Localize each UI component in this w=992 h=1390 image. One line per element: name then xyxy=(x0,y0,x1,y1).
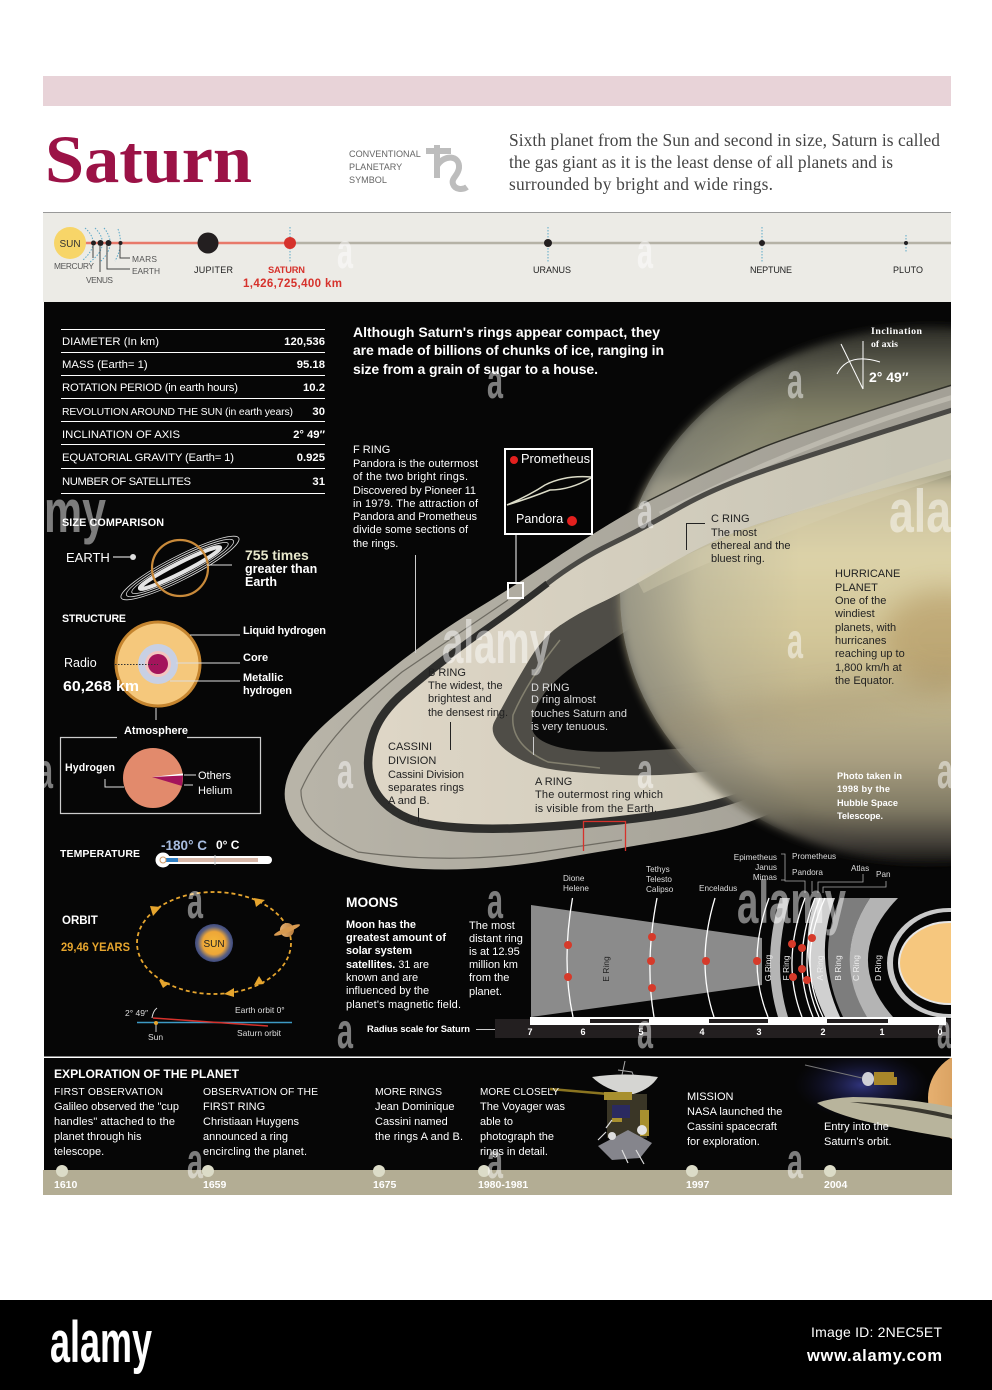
timeline entries xyxy=(54,1087,892,1158)
moon labels: Tethys xyxy=(646,865,670,874)
callout: hurricane planet: HURRICANE xyxy=(835,568,900,580)
planet labels: VENUS xyxy=(86,275,113,285)
inclination of axis: 2° 49″ xyxy=(869,369,909,385)
watermarks: a xyxy=(337,223,354,279)
callout: hurricane planet: 1,800 km/h at xyxy=(835,662,902,674)
temperature: TEMPERATURE xyxy=(60,848,140,860)
stats table: 120,536 xyxy=(284,336,325,348)
Encke gap line xyxy=(301,600,622,858)
structure: hydrogen xyxy=(243,685,292,697)
orbit xyxy=(61,892,301,1042)
image: Cassini spacecraft xyxy=(550,1061,658,1164)
moons text: MOONS xyxy=(346,894,398,910)
radius scale: 0 xyxy=(937,1027,943,1037)
sun: SUN xyxy=(59,239,81,250)
orbit inclination diagram: Sun xyxy=(148,1032,163,1042)
ring labels: B Ring xyxy=(833,955,843,981)
entry 1675: the rings A and B. xyxy=(375,1131,463,1143)
callout: hurricane planet: planets, with xyxy=(835,622,896,634)
planet labels xyxy=(54,254,160,285)
watermarks: a xyxy=(787,613,804,669)
watermarks xyxy=(37,223,954,1189)
saturn distance: 1,426,725,400 km xyxy=(243,278,342,290)
entry 1675 xyxy=(375,1087,463,1143)
callout: hurricane planet: windiest xyxy=(834,608,875,620)
callout: F ring xyxy=(353,444,479,550)
entry 1997 xyxy=(687,1091,782,1148)
entry 1675: Cassini named xyxy=(375,1116,448,1128)
saturn distance: SATURN xyxy=(268,265,305,275)
timeline years xyxy=(54,1179,848,1191)
callout: Cassini division: Cassini Division xyxy=(388,769,464,781)
stats table xyxy=(61,330,326,494)
outer planet labels: NEPTUNE xyxy=(750,265,792,275)
callout: B ring: B RING xyxy=(428,667,466,679)
heading: EXPLORATION OF THE PLANET xyxy=(54,1067,240,1081)
entry 1659: Christiaan Huygens xyxy=(203,1116,300,1128)
moon labels: Janus xyxy=(755,863,777,872)
moons text: satellites. 31 are xyxy=(346,959,429,971)
entry 1659: encircling the planet. xyxy=(203,1146,307,1158)
callout: D ring: touches Saturn and xyxy=(531,708,627,720)
watermarks: a xyxy=(187,873,204,929)
callout: C ring xyxy=(686,513,791,565)
callout: Cassini division: CASSINI xyxy=(388,741,432,753)
stats table: MASS (Earth= 1) xyxy=(62,359,148,371)
timeline years: 1997 xyxy=(686,1179,710,1191)
entry 2004 xyxy=(824,1121,892,1148)
structure: Liquid hydrogen xyxy=(243,625,326,637)
moon orbits xyxy=(567,898,825,1017)
headline callout xyxy=(353,324,664,377)
conventional planetary symbol label: PLANETARY xyxy=(349,162,402,172)
sun: SUN xyxy=(203,939,225,950)
watermarks: a xyxy=(637,483,654,539)
watermarks: a xyxy=(187,1133,204,1189)
moon labels: Calipso xyxy=(646,885,674,894)
inset: Prometheus and Pandora xyxy=(505,449,592,534)
entry 1610: telescope. xyxy=(54,1146,104,1158)
orbit path xyxy=(137,892,291,994)
moons text: solar system xyxy=(346,945,412,957)
radius scale xyxy=(495,1017,951,1038)
stats table: 10.2 xyxy=(303,382,325,394)
entry 1997: MISSION xyxy=(687,1091,734,1103)
orbit arrows xyxy=(150,898,265,997)
photo credit: 1998 by the xyxy=(837,784,890,794)
ring shadow line on the planet xyxy=(644,384,951,504)
callout: F ring: Discovered by Pioneer 11 xyxy=(353,485,476,497)
footer logo: alamy xyxy=(50,1310,152,1375)
watermarks: a xyxy=(487,1133,504,1189)
entry 1997: NASA launched the xyxy=(687,1106,782,1118)
watermarks: a xyxy=(787,1133,804,1189)
callout: C ring: ethereal and the xyxy=(711,540,791,552)
moon labels xyxy=(563,852,891,894)
entry 1610: FIRST OBSERVATION xyxy=(54,1087,163,1098)
stats table: INCLINATION OF AXIS xyxy=(62,429,180,441)
front A ring xyxy=(560,386,951,624)
inclination of axis: Inclination xyxy=(871,326,923,337)
Cassini division over the planet xyxy=(546,408,951,586)
front ring lower edge blend xyxy=(638,470,951,593)
callout: F ring: divide some sections of xyxy=(353,524,469,536)
size comparison: 755 times xyxy=(245,547,309,563)
entry 1610 xyxy=(54,1087,179,1158)
panel: black main xyxy=(44,302,951,1057)
stats table: 2° 49″ xyxy=(293,429,326,441)
photo credit xyxy=(837,771,902,821)
panel: solar system distance strip xyxy=(43,212,951,302)
watermarks: a xyxy=(637,743,654,799)
pointer to ring detail xyxy=(508,534,523,598)
radius scale: 1 xyxy=(879,1027,885,1037)
atmosphere: Helium xyxy=(198,785,232,797)
structure: STRUCTURE xyxy=(62,613,126,625)
intro text: the gas giant as it is the least dense of all planets and is xyxy=(509,152,893,172)
moons text: from the xyxy=(469,972,509,984)
callout: B ring: brightest and xyxy=(428,693,492,705)
icon: saturn vs earth size xyxy=(116,527,244,609)
stats table: 95.18 xyxy=(297,359,325,371)
front B ring xyxy=(560,413,951,625)
inner dark gap xyxy=(532,632,680,752)
entry 1997: Cassini spacecraft xyxy=(687,1121,777,1133)
sun xyxy=(195,924,233,962)
small saturn xyxy=(273,922,301,938)
leader lines xyxy=(93,245,130,272)
timeline dots xyxy=(56,1165,836,1177)
top pink band xyxy=(43,76,951,106)
orbit inclination diagram: Earth orbit 0° xyxy=(235,1005,285,1015)
callout: D ring xyxy=(531,682,627,733)
planet labels: EARTH xyxy=(132,266,160,276)
temperature: -180° C xyxy=(161,837,207,853)
saturn distance xyxy=(243,265,342,290)
atmosphere: Others xyxy=(198,770,232,782)
callout: D ring: D RING xyxy=(531,682,570,694)
inset: Prometheus and Pandora: Pandora xyxy=(516,512,563,526)
moons text: influenced by the xyxy=(346,985,429,997)
watermarks: a xyxy=(637,223,654,279)
callout: B ring xyxy=(428,667,508,719)
callout: hurricane planet: the Equator. xyxy=(835,675,894,687)
stats table: REVOLUTION AROUND THE SUN (in earth years) xyxy=(62,407,293,418)
callout: F ring: Pandora is the outermost xyxy=(353,458,478,470)
callout: hurricane planet xyxy=(834,568,905,687)
orbit inclination diagram xyxy=(125,1005,292,1042)
orbit inclination diagram: Saturn orbit xyxy=(237,1028,282,1038)
footer bar xyxy=(0,1300,992,1390)
watermarks: a xyxy=(937,1003,952,1059)
callout: F ring: in 1979. The attraction of xyxy=(353,498,479,510)
outer planet labels xyxy=(194,265,923,275)
outer planet labels: PLUTO xyxy=(893,265,923,275)
size comparison: greater than xyxy=(245,562,317,576)
planet body xyxy=(620,327,992,863)
moons text: known and are xyxy=(346,972,418,984)
moons text: greatest amount of xyxy=(346,932,446,944)
callout: B ring: The widest, the xyxy=(428,680,503,692)
radius scale: 4 xyxy=(699,1027,705,1037)
conventional planetary symbol label: CONVENTIONAL xyxy=(349,149,421,159)
ring bands xyxy=(770,898,898,1017)
icon: saturn symbol xyxy=(426,145,467,189)
temperature xyxy=(60,837,272,868)
stats table: 30 xyxy=(312,406,325,418)
moons text: million km xyxy=(469,959,518,971)
moon labels: Mimas xyxy=(753,873,777,882)
entry 1610: handles" attached to the xyxy=(54,1116,175,1128)
B ring xyxy=(372,577,729,824)
photo credit: Hubble Space xyxy=(837,798,898,808)
ring labels: G Ring xyxy=(763,955,773,981)
callout: C ring: C RING xyxy=(711,513,750,525)
inset: Prometheus and Pandora: Prometheus xyxy=(521,452,590,466)
moon labels: Epimetheus xyxy=(734,853,777,862)
headline callout: are made of billions of chunks of ice, ranging in xyxy=(353,342,664,358)
A ring xyxy=(284,508,766,870)
inclination of axis xyxy=(837,326,923,389)
stats table: 0.925 xyxy=(297,452,325,464)
entry 1980-1981: able to xyxy=(480,1116,513,1128)
C ring xyxy=(492,591,704,776)
radius scale: 2 xyxy=(820,1027,826,1037)
radius scale: 3 xyxy=(756,1027,762,1037)
moons text xyxy=(346,894,523,1011)
Cassini division, upper left xyxy=(449,584,548,656)
moons and rings diagram: E Ring xyxy=(601,956,611,982)
radius scale: 5 xyxy=(638,1027,644,1037)
timeline band xyxy=(43,1170,952,1195)
entry 1980-1981: The Voyager was xyxy=(480,1101,565,1113)
atmosphere: Atmosphere xyxy=(124,725,188,737)
callout: Cassini division xyxy=(388,741,464,807)
callout: Cassini division: A and B. xyxy=(388,795,430,807)
callout: F ring: the rings. xyxy=(353,538,398,550)
entry 1659: announced a ring xyxy=(203,1131,288,1143)
callout: B ring: the densest ring. xyxy=(428,707,508,719)
structure diagram xyxy=(115,622,200,706)
moon labels: Dione xyxy=(563,874,585,883)
callout: Cassini division: separates rings xyxy=(388,782,464,794)
C ring detail xyxy=(513,640,600,768)
size comparison: EARTH xyxy=(66,550,110,565)
atmosphere xyxy=(60,725,260,814)
callout: hurricane planet: reaching up to xyxy=(835,648,905,660)
callout: hurricane planet: One of the xyxy=(835,595,886,607)
conventional planetary symbol label xyxy=(349,149,421,185)
callout: F ring: Pandora and Prometheus xyxy=(353,511,478,523)
stats table: EQUATORIAL GRAVITY (Earth= 1) xyxy=(62,452,234,464)
ring labels: C Ring xyxy=(851,955,861,981)
timeline years: 1675 xyxy=(373,1179,397,1191)
stats table: NUMBER OF SATELLITES xyxy=(62,476,191,488)
entry 2004: Entry into the xyxy=(824,1121,889,1133)
callout: C ring: The most xyxy=(711,527,757,539)
photo credit: Telescope. xyxy=(837,811,883,821)
moon labels: Prometheus xyxy=(792,852,836,861)
entry 1659 xyxy=(203,1087,318,1158)
callout: A ring xyxy=(535,776,663,815)
ring labels xyxy=(763,955,883,981)
structure xyxy=(62,613,326,720)
structure: Metallic xyxy=(243,672,283,684)
planet labels: MERCURY xyxy=(54,261,94,271)
moon labels: Telesto xyxy=(646,875,672,884)
watermarks: alamy xyxy=(737,869,846,936)
callout: D ring: is very tenuous. xyxy=(531,721,608,733)
watermarks: ala xyxy=(889,478,951,545)
callout: hurricane planet: hurricanes xyxy=(835,635,887,647)
watermarks: a xyxy=(937,743,954,799)
planets on scale xyxy=(91,232,908,254)
orbit: 29,46 YEARS xyxy=(61,942,130,954)
moon labels: Pandora xyxy=(792,868,823,877)
moon labels: Pan xyxy=(876,870,891,879)
entry 1610: planet through his xyxy=(54,1131,142,1143)
callout: A ring: A RING xyxy=(535,776,572,788)
moons text: planet's magnetic field. xyxy=(346,999,461,1011)
timeline years: 1659 xyxy=(203,1179,227,1191)
watermarks: a xyxy=(337,1003,354,1059)
callout: D ring: D ring almost xyxy=(531,694,596,706)
moons text: is at 12.95 xyxy=(469,946,520,958)
moons text: planet. xyxy=(469,986,502,998)
radius scale label: Radius scale for Saturn xyxy=(367,1023,470,1034)
inner planet orbits xyxy=(83,227,906,262)
image id: Image ID: 2NEC5ET xyxy=(811,1324,942,1340)
stats table: ROTATION PERIOD (in earth hours) xyxy=(62,382,238,394)
headline callout: Although Saturn's rings appear compact, they xyxy=(353,324,660,340)
structure: 60,268 km xyxy=(63,679,139,695)
ring labels: F Ring xyxy=(781,955,791,981)
entry 2004: Saturn's orbit. xyxy=(824,1136,892,1148)
entry 1980-1981: MORE CLOSELY xyxy=(480,1087,559,1098)
image: Cassini entering Saturn's orbit xyxy=(804,1058,952,1139)
entry 1610: Galileo observed the "cup xyxy=(54,1101,179,1113)
ring labels: D Ring xyxy=(873,955,883,981)
entry 1675: Jean Dominique xyxy=(375,1101,454,1113)
structure: Radio xyxy=(64,656,97,670)
timeline years: 1610 xyxy=(54,1179,78,1191)
entry 1997: for exploration. xyxy=(687,1136,760,1148)
site url: www.alamy.com xyxy=(806,1347,942,1365)
entry 1675: MORE RINGS xyxy=(375,1087,442,1098)
stats table: 31 xyxy=(312,476,325,488)
entry 1659: FIRST RING xyxy=(203,1101,265,1113)
pie chart xyxy=(123,748,183,808)
stats table: DIAMETER (In km) xyxy=(62,336,159,348)
planet cloud bands xyxy=(620,362,951,828)
intro text: Sixth planet from the Sun and second in size, Saturn is called xyxy=(509,130,940,150)
E ring xyxy=(531,905,762,1017)
planet and inner rings xyxy=(887,908,951,1018)
entry 1980-1981: photograph the xyxy=(480,1131,554,1143)
entry 1980-1981: rings in detail. xyxy=(480,1146,548,1158)
moons text: distant ring xyxy=(469,933,523,945)
temperature: 0° C xyxy=(216,838,240,852)
atmosphere: Hydrogen xyxy=(65,762,115,774)
watermarks: a xyxy=(787,353,804,409)
callout: F ring: F RING xyxy=(353,444,390,456)
intro text: surrounded by bright and wide rings. xyxy=(509,174,773,194)
watermarks: alamy xyxy=(442,609,551,676)
moon labels: Enceladus xyxy=(699,884,737,893)
entry 1659: OBSERVATION OF THE xyxy=(203,1087,318,1098)
moons xyxy=(564,933,816,992)
headline callout: size from a grain of sugar to a house. xyxy=(353,361,598,377)
intro text xyxy=(509,130,940,194)
rings in front of the planet xyxy=(560,386,951,625)
moons and rings diagram xyxy=(495,852,992,1038)
watermarks: a xyxy=(637,1003,654,1059)
orbit line xyxy=(85,242,951,244)
front ring highlight xyxy=(659,395,951,515)
callout: hurricane planet: PLANET xyxy=(835,582,878,594)
size comparison: Earth xyxy=(245,575,277,589)
watermarks: a xyxy=(37,743,54,799)
entry 1980-1981 xyxy=(480,1087,565,1158)
radius scale: 6 xyxy=(580,1027,586,1037)
sun xyxy=(54,227,86,259)
moon leaders xyxy=(781,854,886,893)
panel: exploration of the planet xyxy=(43,1051,992,1195)
callout: F ring: of the two bright rings. xyxy=(353,471,468,483)
thermometer xyxy=(156,852,272,868)
watermarks: a xyxy=(487,353,504,409)
inclination of axis: of axis xyxy=(871,339,898,350)
timeline years: 2004 xyxy=(824,1179,848,1191)
callout: A ring: The outermost ring which xyxy=(535,789,663,801)
rings behind the planet xyxy=(284,508,766,870)
watermarks: a xyxy=(487,873,504,929)
moons text: The most xyxy=(469,920,515,932)
orbit: ORBIT xyxy=(62,915,98,927)
watermarks: a xyxy=(337,743,354,799)
moon labels: Helene xyxy=(563,884,589,893)
Cassini division xyxy=(368,656,745,829)
ring labels: A Ring xyxy=(815,955,825,981)
moon labels: Atlas xyxy=(851,864,869,873)
callout: Cassini division: DIVISION xyxy=(388,755,436,767)
size comparison: SIZE COMPARISON xyxy=(62,517,164,529)
title: Saturn xyxy=(45,121,252,197)
moons text: Moon has the xyxy=(346,919,416,931)
timeline years: 1980-1981 xyxy=(478,1179,528,1191)
callout: A ring: is visible from the Earth. xyxy=(535,803,657,815)
radius scale: 7 xyxy=(527,1027,533,1037)
photo credit: Photo taken in xyxy=(837,771,902,781)
structure: Core xyxy=(243,652,268,664)
photo: saturn and rings xyxy=(285,327,992,870)
outer planet labels: JUPITER xyxy=(194,265,234,275)
outer planet labels: URANUS xyxy=(533,265,571,275)
orbit inclination diagram: 2° 49″ xyxy=(125,1008,148,1018)
callout: C ring: bluest ring. xyxy=(711,553,765,565)
size comparison xyxy=(62,517,317,609)
conventional planetary symbol label: SYMBOL xyxy=(349,175,387,185)
watermarks: my xyxy=(44,478,106,545)
planet labels: MARS xyxy=(132,254,157,264)
